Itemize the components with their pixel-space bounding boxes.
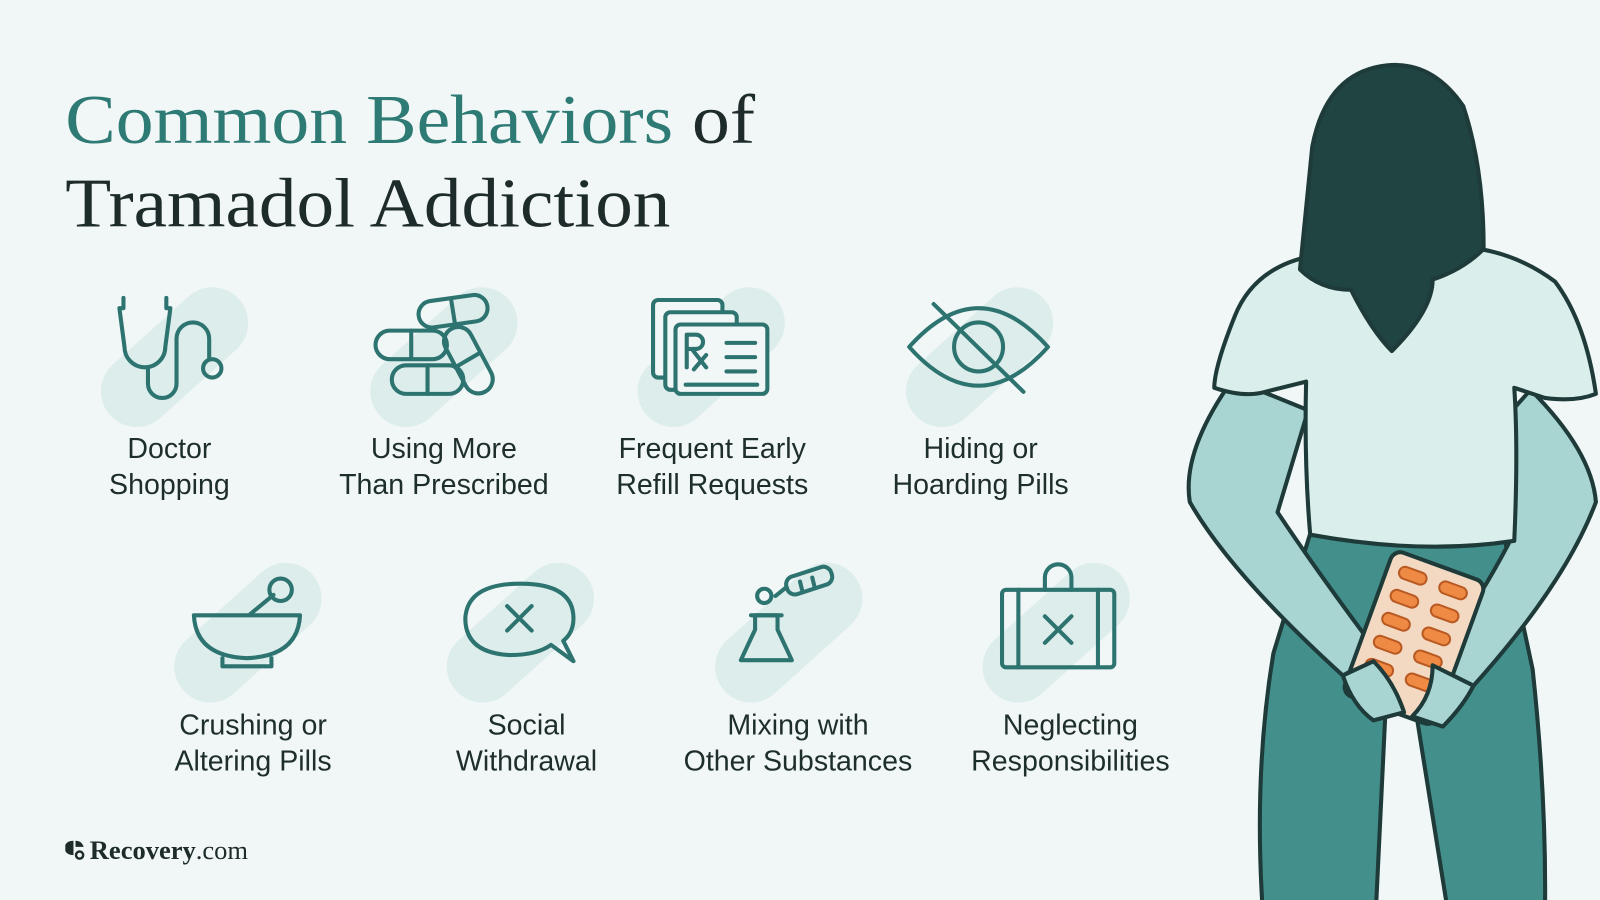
- item: crushing: [160, 548, 336, 777]
- hands: [1343, 661, 1404, 720]
- title: [65, 82, 756, 243]
- item: neglecting: Responsibilities: [971, 745, 1170, 777]
- title: Common Behaviors of: [65, 82, 756, 159]
- item: refills: [616, 273, 808, 501]
- icon: flask and dropper: [741, 565, 834, 660]
- item: mixing: Other Substances: [684, 745, 912, 777]
- item: mixing: [684, 548, 912, 777]
- pants: [1260, 520, 1545, 900]
- icon: stethoscope: [119, 298, 221, 398]
- item: hiding: [891, 273, 1069, 501]
- item: social: Withdrawal: [456, 745, 597, 777]
- icon: mortar: [194, 579, 300, 666]
- arms: [1189, 380, 1380, 676]
- icon: pills: [376, 293, 498, 398]
- illustration: woman holding pills behind back: [1189, 65, 1596, 900]
- item: neglecting: Neglecting: [1003, 710, 1138, 742]
- shirt: [1214, 247, 1596, 547]
- item: using more: [339, 273, 549, 501]
- logo: Recovery.com: [90, 835, 248, 865]
- item: hiding: Hiding or: [923, 433, 1038, 465]
- item: doctor shopping: Shopping: [109, 469, 230, 501]
- item: refills: Frequent Early: [619, 433, 807, 465]
- hair: [1300, 65, 1484, 351]
- icon: prescriptions: [653, 300, 767, 394]
- icon: speech bubble: [465, 584, 573, 661]
- item: using more: Than Prescribed: [339, 469, 549, 501]
- item: social: [432, 548, 609, 777]
- blister pack: [1342, 549, 1486, 727]
- item: mixing: Mixing with: [727, 710, 869, 742]
- item: refills: Refill Requests: [616, 469, 808, 501]
- item: using more: Using More: [371, 433, 517, 465]
- icon: crossed eye: [909, 304, 1048, 392]
- item: doctor shopping: [86, 273, 263, 501]
- icon: briefcase: [1002, 564, 1114, 667]
- title: Tramadol Addiction: [65, 166, 670, 243]
- item: crushing: Crushing or: [179, 710, 327, 742]
- item: neglecting: [968, 548, 1170, 777]
- item: doctor shopping: Doctor: [127, 433, 212, 465]
- item: crushing: Altering Pills: [174, 745, 332, 777]
- item: social: Social: [488, 710, 565, 742]
- item: hiding: Hoarding Pills: [892, 469, 1069, 501]
